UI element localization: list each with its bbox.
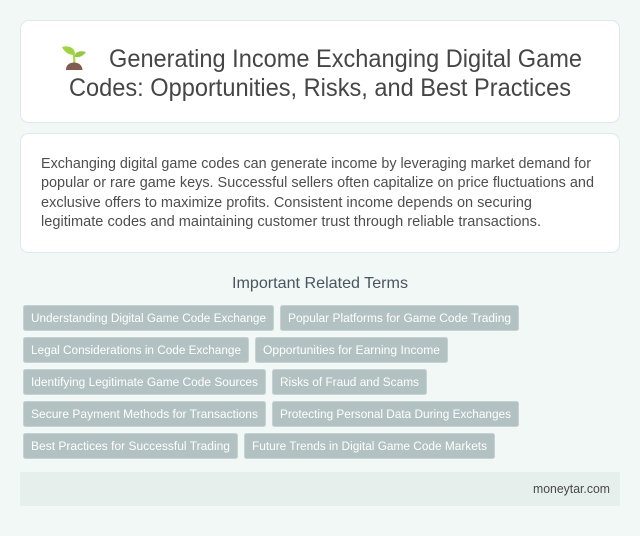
- tag: [24, 370, 266, 394]
- panel: description card: [20, 134, 620, 252]
- tag: [24, 402, 266, 426]
- heading: important related terms: Important Related Terms: [232, 275, 408, 292]
- tag: [24, 306, 274, 330]
- title line 2: Codes: Opportunities, Risks, and Best Practices: [69, 74, 571, 102]
- description line 2: popular or rare game keys. Successful sellers often capitalize on price fluctuations and: [41, 175, 594, 191]
- tag: [24, 338, 248, 362]
- tag: Understanding Digital Game Code Exchange: [31, 311, 266, 325]
- description line 3: exclusive offers to maximize profits. Consistent income depends on securing: [41, 195, 532, 211]
- tag: Future Trends in Digital Game Code Markets: [252, 439, 487, 453]
- tag: [256, 338, 448, 362]
- panel: related term tags: [24, 306, 518, 458]
- tag: Identifying Legitimate Game Code Sources: [31, 375, 258, 389]
- tag: [280, 306, 518, 330]
- tag: [272, 370, 426, 394]
- tag: Protecting Personal Data During Exchanges: [280, 407, 511, 421]
- tag: [24, 434, 238, 458]
- icon: seedling: [62, 46, 86, 70]
- description line 4: legitimate codes and maintaining customer trust through reliable transactions.: [41, 214, 541, 230]
- footer source text: moneytar.com: [533, 482, 610, 496]
- tag: Secure Payment Methods for Transactions: [31, 407, 258, 421]
- title line 1: Generating Income Exchanging Digital Game: [109, 45, 582, 73]
- tag: Legal Considerations in Code Exchange: [31, 343, 241, 357]
- description line 1: Exchanging digital game codes can generate income by leveraging market demand for: [41, 156, 591, 172]
- tag: Popular Platforms for Game Code Trading: [288, 311, 511, 325]
- tag: [272, 402, 518, 426]
- tag: [244, 434, 494, 458]
- footer bar: [20, 472, 620, 506]
- tag: Risks of Fraud and Scams: [280, 375, 419, 389]
- panel: title card: [20, 20, 620, 122]
- tag: Opportunities for Earning Income: [263, 343, 440, 357]
- tag: Best Practices for Successful Trading: [31, 439, 230, 453]
